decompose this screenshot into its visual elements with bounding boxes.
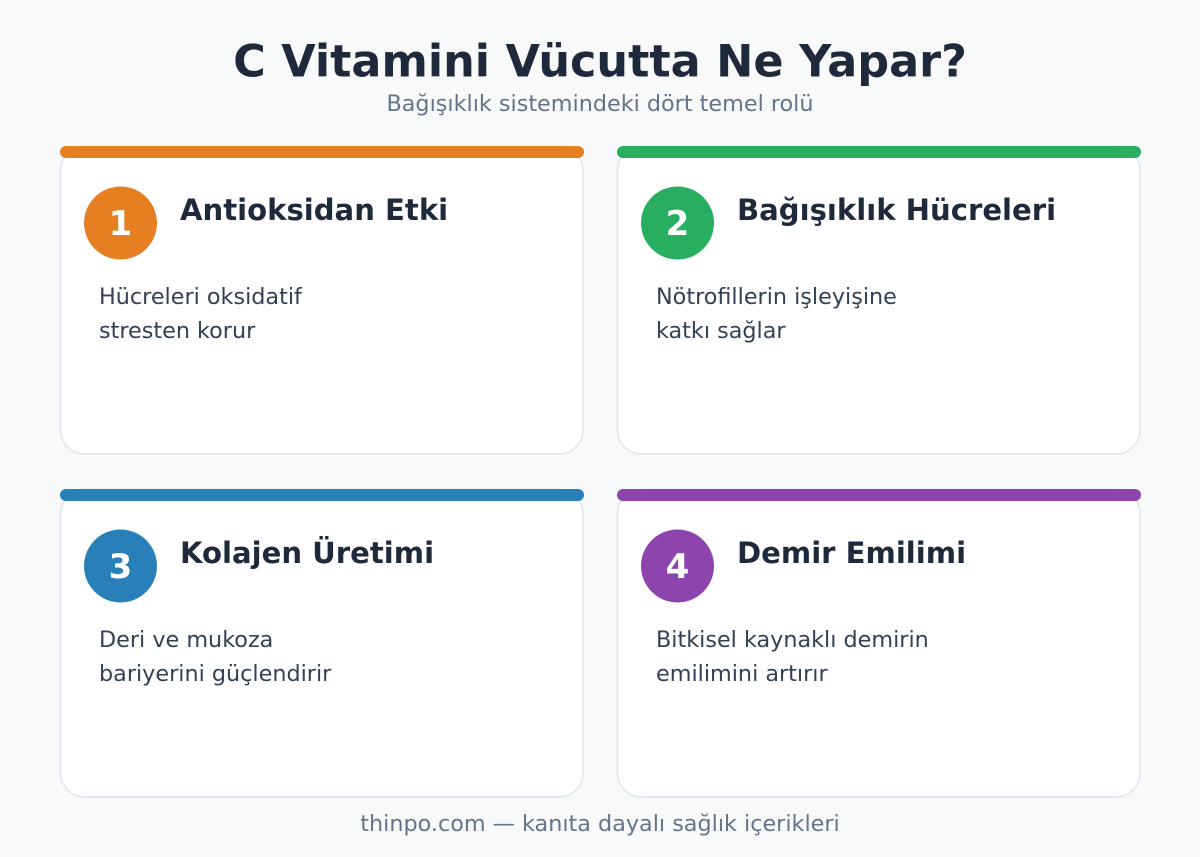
card text: katkı sağlar <box>656 318 786 344</box>
number badge: 3 <box>109 547 132 587</box>
card text: bariyerini güçlendirir <box>99 661 332 687</box>
number badge <box>84 530 157 602</box>
subtitle: Bağışıklık sistemindeki dört temel rolü <box>386 91 814 117</box>
number badge: 1 <box>109 204 132 244</box>
number badge <box>641 186 714 260</box>
card heading: Demir Emilimi <box>737 536 966 570</box>
panel: Kolajen Üretimi <box>60 489 584 797</box>
card heading: Antioksidan Etki <box>180 193 448 227</box>
card text: Hücreleri oksidatif <box>99 284 303 310</box>
card heading: Kolajen Üretimi <box>180 536 434 570</box>
accent bar <box>617 489 1141 501</box>
card text: Deri ve mukoza <box>99 627 273 653</box>
number badge <box>641 530 714 602</box>
card text: emilimini artırır <box>656 661 828 687</box>
accent bar <box>617 146 1141 158</box>
footer: thinpo.com — kanıta dayalı sağlık içerikleri <box>360 811 840 837</box>
card background <box>60 490 583 797</box>
card background <box>618 490 1140 797</box>
accent bar <box>60 489 584 501</box>
card text: Nötrofillerin işleyişine <box>656 284 897 310</box>
card text: stresten korur <box>99 318 256 344</box>
card heading: Bağışıklık Hücreleri <box>737 193 1056 227</box>
title: C Vitamini Vücutta Ne Yapar? <box>233 36 967 88</box>
panel: Demir Emilimi <box>617 489 1141 797</box>
panel: Antioksidan Etki <box>60 146 584 454</box>
card background <box>618 146 1140 454</box>
panel: Bağışıklık Hücreleri <box>617 146 1141 454</box>
card text: Bitkisel kaynaklı demirin <box>656 627 929 653</box>
card background <box>60 146 583 454</box>
number badge: 4 <box>666 547 689 587</box>
number badge <box>84 186 157 260</box>
number badge: 2 <box>666 204 689 244</box>
accent bar <box>60 146 584 158</box>
